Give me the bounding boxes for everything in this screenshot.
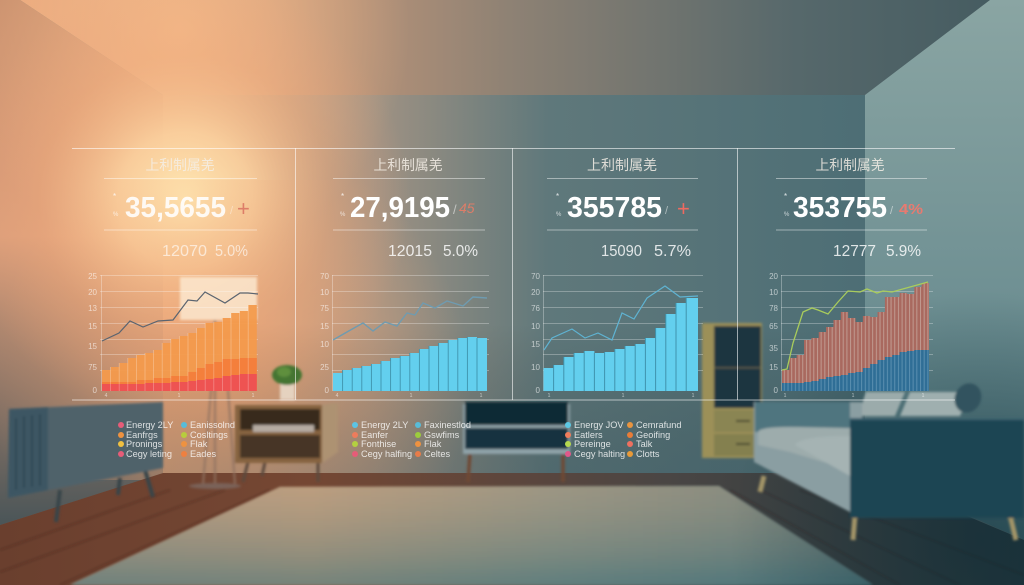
panel 2 legend: Fonthise (361, 439, 396, 449)
panel 1 axis labels: 13 (88, 304, 98, 313)
panel 2 axis labels: 70 (320, 272, 330, 281)
ceiling (20, 0, 990, 95)
panel 4 title: 上利制属羌 (816, 157, 884, 173)
panel 2 axis labels: 0 (325, 386, 330, 395)
panel 2 (320, 157, 489, 459)
floor (0, 473, 1024, 585)
panel 4 axis labels (769, 272, 925, 399)
panel 3 main value: % (556, 212, 562, 218)
panel 4 chart (769, 272, 933, 399)
panel 4 main value: % (784, 212, 790, 218)
side table (235, 403, 338, 482)
panel 4 main value (784, 192, 923, 224)
panel 1 title: 上利制属羌 (146, 157, 214, 173)
panel 3 axis labels: 70 (531, 272, 541, 281)
panel 2 chart (320, 272, 489, 399)
panel 2 axis labels (320, 272, 483, 399)
right wall (865, 0, 1024, 540)
panel 4 main value: / (890, 205, 894, 217)
panel 2 sub stats: 12015 (388, 243, 432, 260)
panel 2 legend: Faxinestlod (424, 420, 471, 430)
panel 2 main value: 45 (459, 200, 475, 216)
panel 4 stacked bars (782, 283, 929, 391)
panel 2 axis labels: 75 (320, 304, 330, 313)
panel 1 main value: + (237, 196, 250, 221)
panel 1 chart (88, 272, 258, 399)
panel 3 chart (531, 272, 703, 399)
panel 2 main value: 27,9195 (350, 192, 450, 224)
panel 4 main value: * (784, 192, 787, 201)
panel 1 sub stats (162, 243, 248, 260)
panel 4 axis labels: 1 (784, 393, 787, 399)
rug (70, 486, 873, 585)
panel 4 axis labels: 65 (769, 322, 779, 331)
panel 3 legend: Geoifing (636, 430, 670, 440)
panel 3 axis labels: 20 (531, 288, 541, 297)
panel 1 axis labels: 1 (252, 393, 255, 399)
panel 4 axis labels: 78 (769, 304, 779, 313)
floor lamp (180, 277, 257, 489)
panel 2 legend: Cegy halfing (361, 449, 412, 459)
panel 4 axis labels: 1 (852, 393, 855, 399)
panel 1 legend: Pronings (126, 439, 163, 449)
panel 1 legend: Cegy leting (126, 449, 172, 459)
panel 4 axis labels: 15 (769, 363, 779, 372)
panel 2 axis labels: 1 (410, 393, 413, 399)
panel 3 sub stats: 15090 (601, 243, 642, 260)
left wall (0, 0, 163, 525)
panel 4 axis labels: 1 (922, 393, 925, 399)
panel 2 axis labels: 10 (320, 340, 330, 349)
panel 1 axis labels: 20 (88, 288, 98, 297)
panel 1 axis labels: 15 (88, 342, 98, 351)
panel 3 legend: Talk (636, 439, 653, 449)
radiator (8, 402, 163, 522)
panel 4 main value: 353755 (793, 192, 887, 224)
panel 4 (769, 157, 933, 399)
panel 3 legend: Clotts (636, 449, 660, 459)
panel 4 axis labels: 10 (769, 288, 779, 297)
panel 3 bars (544, 298, 698, 391)
panel 3 axis labels (531, 272, 695, 399)
potted plant (272, 365, 302, 400)
panel 4 axis labels: 35 (769, 344, 779, 353)
panel 1 main value: / (230, 205, 234, 217)
panel 3 legend: Eatlers (574, 430, 603, 440)
panel 3 (531, 157, 703, 459)
back wall (163, 95, 865, 475)
panel 1 axis labels: 1 (178, 393, 181, 399)
panel 1 trend line (102, 292, 258, 341)
panel 4 sub stats (833, 243, 921, 260)
panel 1 axis labels: 15 (88, 322, 98, 331)
panel 3 title: 上利制属羌 (587, 157, 657, 173)
panel 1 main value: 35,5655 (125, 192, 226, 224)
panel 3 main value: 355785 (567, 192, 662, 224)
panel 1 legend (118, 420, 235, 459)
panel 4 trend line (782, 282, 928, 370)
panel 3 legend: Energy JOV (574, 420, 624, 430)
panel 3 axis labels: 76 (531, 304, 541, 313)
panel 2 legend: Flak (424, 439, 442, 449)
panel 2 sub stats (388, 243, 478, 260)
panel 3 axis labels: 0 (536, 386, 541, 395)
panel 3 sub stats (601, 243, 691, 260)
panel 3 axis labels: 1 (548, 393, 551, 399)
panel 3 main value: + (677, 196, 690, 221)
panel 2 axis labels: 1 (480, 393, 483, 399)
wall glow (0, 0, 374, 142)
panel 4 main value: 4% (899, 201, 923, 218)
dashboard frame (72, 148, 955, 400)
furniture (8, 277, 1024, 540)
panel 3 sub stats: 5.7% (654, 243, 691, 260)
panel 2 axis labels: 10 (320, 288, 330, 297)
panel 1 sub stats: 5.0% (215, 243, 248, 260)
panel 1 legend: Eanfrgs (126, 430, 158, 440)
panel 1 header rules (104, 178, 257, 230)
panel 2 legend: Energy 2LY (361, 420, 408, 430)
panel 1 (88, 157, 258, 459)
panel 2 axis labels: 4 (336, 393, 339, 399)
panel 1 legend: Energy 2LY (126, 420, 173, 430)
panel 3 header rules (547, 178, 698, 230)
panel 3 legend: Cegy halting (574, 449, 625, 459)
panel 2 legend: Celtes (424, 449, 450, 459)
panel 4 sub stats: 5.9% (886, 243, 921, 260)
panel 2 main value: * (341, 192, 344, 201)
panel 1 main value: % (113, 212, 119, 218)
panel 3 axis labels: 1 (692, 393, 695, 399)
panel 1 main value: * (113, 192, 116, 201)
panel 4 axis labels: 20 (769, 272, 779, 281)
panel 1 legend: Cosltings (190, 430, 228, 440)
panel 2 legend: Eanfer (361, 430, 388, 440)
panel 2 legend: Gswfims (424, 430, 460, 440)
panel 2 axis labels: 15 (320, 322, 330, 331)
panel 1 axis labels: 0 (93, 386, 98, 395)
panel 3 legend (565, 420, 681, 459)
panel 1 axis labels: 75 (88, 363, 98, 372)
panel 2 sub stats: 5.0% (443, 243, 478, 260)
panel 3 trend line (544, 286, 698, 350)
panel 2 bars (333, 337, 487, 391)
panel 2 legend (352, 420, 471, 459)
panel 2 title: 上利制属羌 (374, 157, 442, 173)
panel 1 axis labels: 4 (105, 393, 108, 399)
panel 3 legend: Cemrafund (636, 420, 681, 430)
sofa (754, 379, 1024, 540)
panel 2 main value: / (453, 202, 457, 217)
panel 3 axis labels: 15 (531, 340, 541, 349)
panel 3 main value: / (665, 205, 669, 217)
panel 3 main value: * (556, 192, 559, 201)
panel 3 axis labels: 10 (531, 363, 541, 372)
panel 1 legend: Eanissolnd (190, 420, 235, 430)
panel 3 axis labels: 1 (622, 393, 625, 399)
panel 4 sub stats: 12777 (833, 243, 876, 260)
panel 2 trend line (333, 297, 487, 340)
bookcase (702, 323, 762, 458)
panel 1 legend: Flak (190, 439, 208, 449)
panel 1 sub stats: 12070 (162, 243, 207, 260)
panel 2 main value: % (340, 212, 346, 218)
panel 3 axis labels: 10 (531, 322, 541, 331)
tv unit (463, 402, 570, 482)
panel 2 axis labels: 25 (320, 363, 330, 372)
panel 1 stacked bars (102, 305, 257, 391)
panel 1 axis labels: 25 (88, 272, 98, 281)
panel 2 header rules (333, 178, 485, 230)
panel 4 header rules (776, 178, 927, 230)
panel 4 axis labels: 0 (774, 386, 779, 395)
panel 1 axis labels (88, 272, 255, 399)
panel 1 legend: Eades (190, 449, 216, 459)
panel 3 legend: Pereinge (574, 439, 611, 449)
